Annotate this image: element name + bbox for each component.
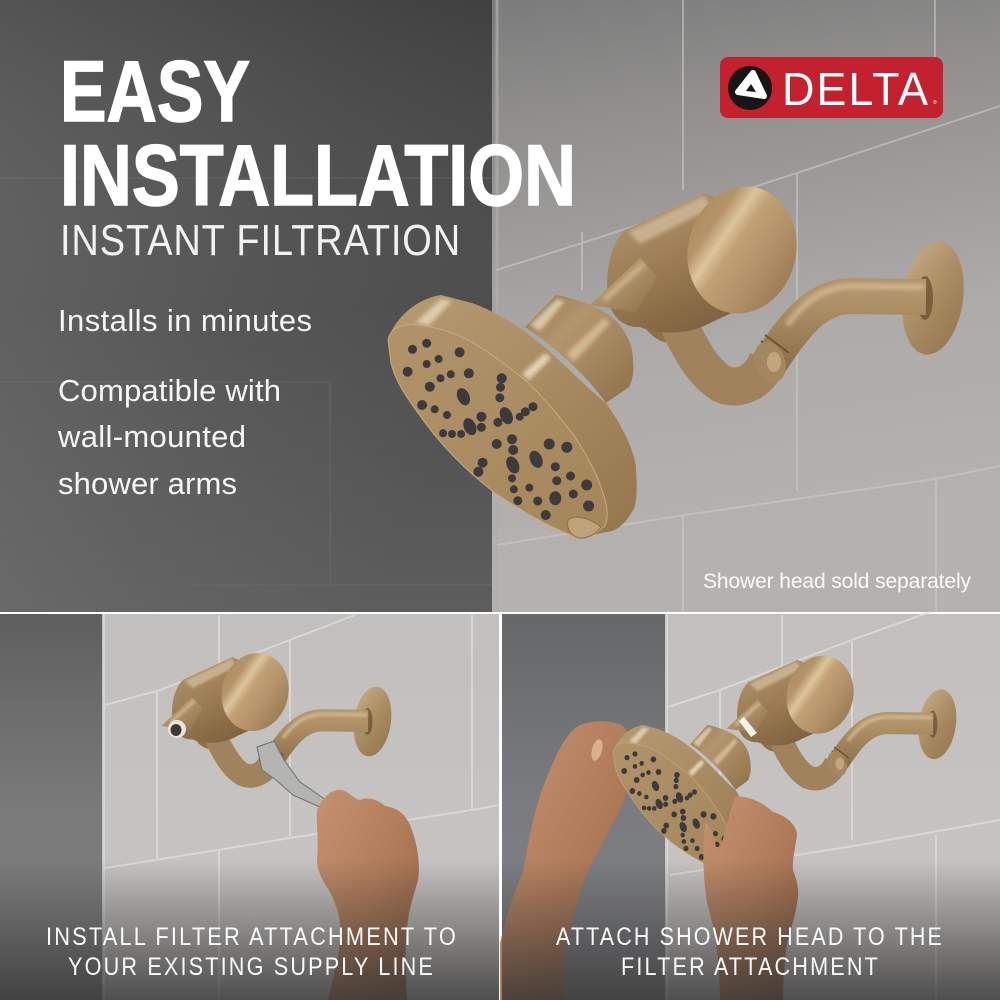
step 2 caption <box>556 923 944 981</box>
shower head, step 2 <box>613 725 753 871</box>
step 2 caption: FILTER ATTACHMENT <box>621 953 880 981</box>
right hand holding head <box>703 797 798 1000</box>
white thread seal <box>739 717 757 737</box>
text block: benefits: Compatible with <box>58 373 281 408</box>
subtitle: INSTANT FILTRATION <box>60 216 461 265</box>
note: shower head sold separately: Shower head sold separately <box>703 570 972 593</box>
filter attachment, step 1 <box>162 646 396 776</box>
logo: Delta: ® <box>933 99 937 106</box>
panel: hero wall background <box>0 0 1000 612</box>
panel: step 2 attach shower head <box>500 612 1000 1000</box>
title <box>60 44 576 224</box>
title: INSTALLATION <box>60 128 576 224</box>
step 1 caption: YOUR EXISTING SUPPLY LINE <box>68 953 435 981</box>
hero shower arm and filter attachment <box>590 175 971 387</box>
panel: step 1 install filter attachment <box>0 614 499 1000</box>
title: EASY <box>60 44 250 140</box>
threaded outlet <box>168 720 186 738</box>
step 1 caption: INSTALL FILTER ATTACHMENT TO <box>46 923 458 951</box>
step 1 caption <box>46 923 458 981</box>
step 2 caption: ATTACH SHOWER HEAD TO THE <box>556 923 944 951</box>
hand holding wrench <box>317 790 419 1000</box>
text block: benefits: shower arms <box>58 466 237 501</box>
text block: benefits: Installs in minutes <box>58 303 312 338</box>
logo: Delta: DELTA <box>782 63 930 115</box>
thumb nail <box>589 738 605 762</box>
text block: benefits <box>57 303 312 501</box>
filter attachment, step 2 <box>727 649 961 779</box>
hero shower head <box>388 295 637 538</box>
text block: benefits: wall-mounted <box>57 419 246 454</box>
wrench <box>257 741 329 808</box>
arm and left hand behind head <box>500 721 640 1000</box>
logo: Delta <box>720 57 943 118</box>
